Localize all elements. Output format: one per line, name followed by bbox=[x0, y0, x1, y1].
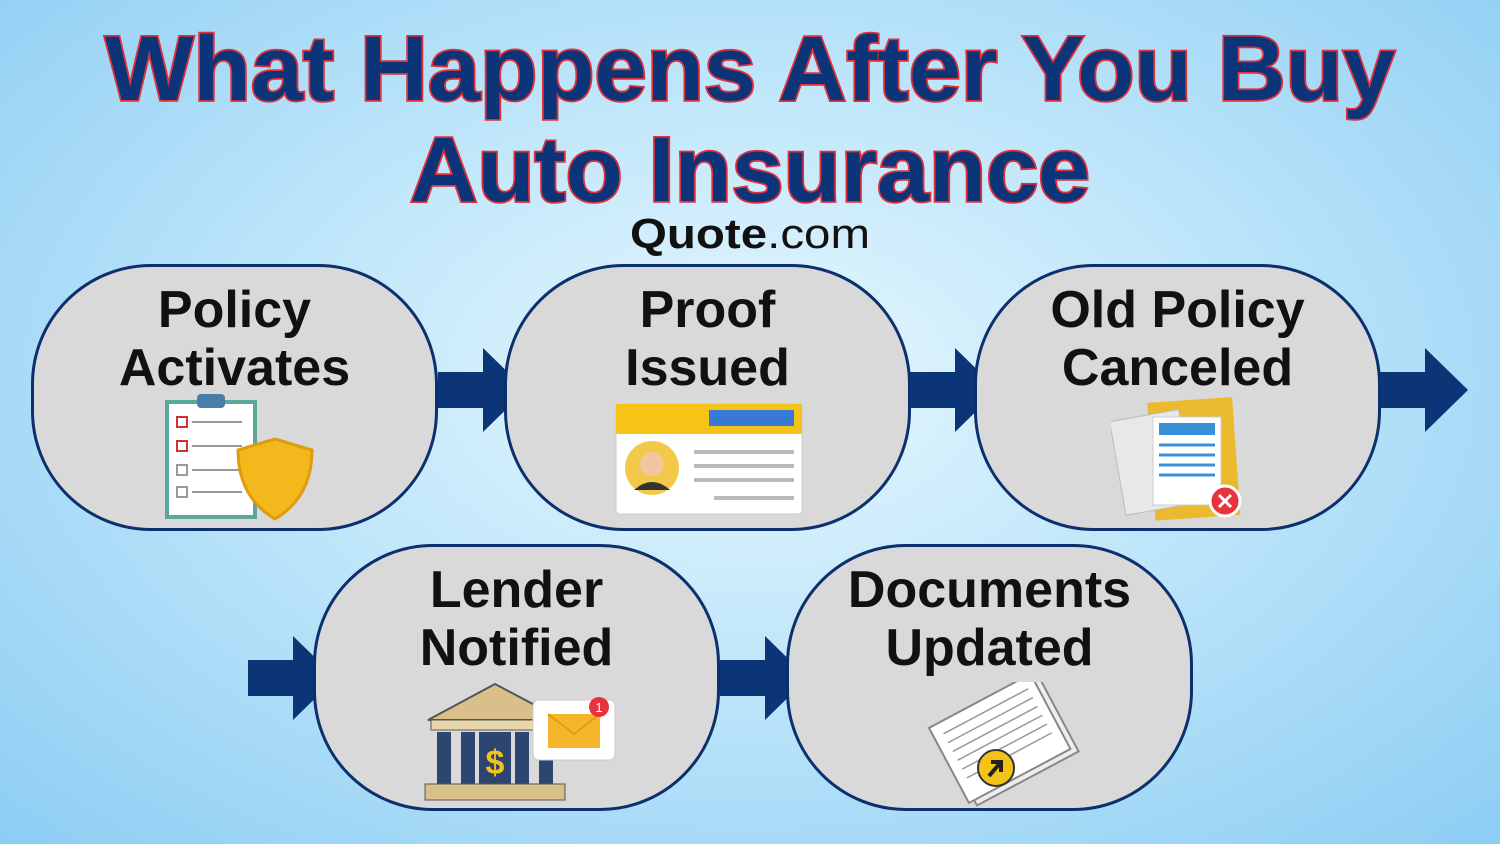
arrow 4 bbox=[248, 636, 314, 720]
icon: bank with mail: $ bbox=[486, 744, 505, 782]
panel: Policy Activates bbox=[31, 264, 438, 531]
heading: Notified bbox=[420, 619, 613, 677]
icon: canceled documents bbox=[1111, 397, 1242, 521]
heading: Issued bbox=[625, 339, 790, 397]
panel: Lender Notified bbox=[313, 544, 720, 811]
heading bbox=[420, 561, 613, 677]
icon: bank with mail bbox=[424, 682, 616, 800]
arrow 2 bbox=[910, 348, 976, 432]
heading: Lender bbox=[430, 561, 603, 619]
arrow 5 bbox=[720, 636, 786, 720]
brand: Quote.com: Quote .com bbox=[630, 210, 870, 257]
heading bbox=[1050, 281, 1305, 397]
panel: Proof Issued bbox=[504, 264, 911, 531]
icon: bank with mail: 1 bbox=[595, 700, 603, 715]
icon: updated documents bbox=[928, 682, 1080, 807]
heading: Updated bbox=[886, 619, 1094, 677]
heading: Canceled bbox=[1062, 339, 1293, 397]
panel: Old Policy Canceled bbox=[974, 264, 1381, 531]
heading: Documents bbox=[848, 561, 1131, 619]
panel: Documents Updated bbox=[786, 544, 1193, 811]
heading: Old Policy bbox=[1050, 281, 1305, 339]
heading bbox=[625, 281, 790, 397]
heading bbox=[848, 561, 1131, 677]
arrow 3 bbox=[1380, 348, 1468, 432]
icon: clipboard with shield bbox=[165, 394, 314, 521]
icon: ID card bbox=[616, 404, 802, 514]
heading: Policy bbox=[158, 281, 311, 339]
heading: Activates bbox=[119, 339, 350, 397]
title: Auto Insurance bbox=[410, 119, 1090, 221]
arrow 1 bbox=[438, 348, 505, 432]
heading bbox=[119, 281, 350, 397]
title: What Happens After You Buy bbox=[105, 18, 1395, 120]
heading: Proof bbox=[640, 281, 775, 339]
title bbox=[102, 18, 1397, 257]
